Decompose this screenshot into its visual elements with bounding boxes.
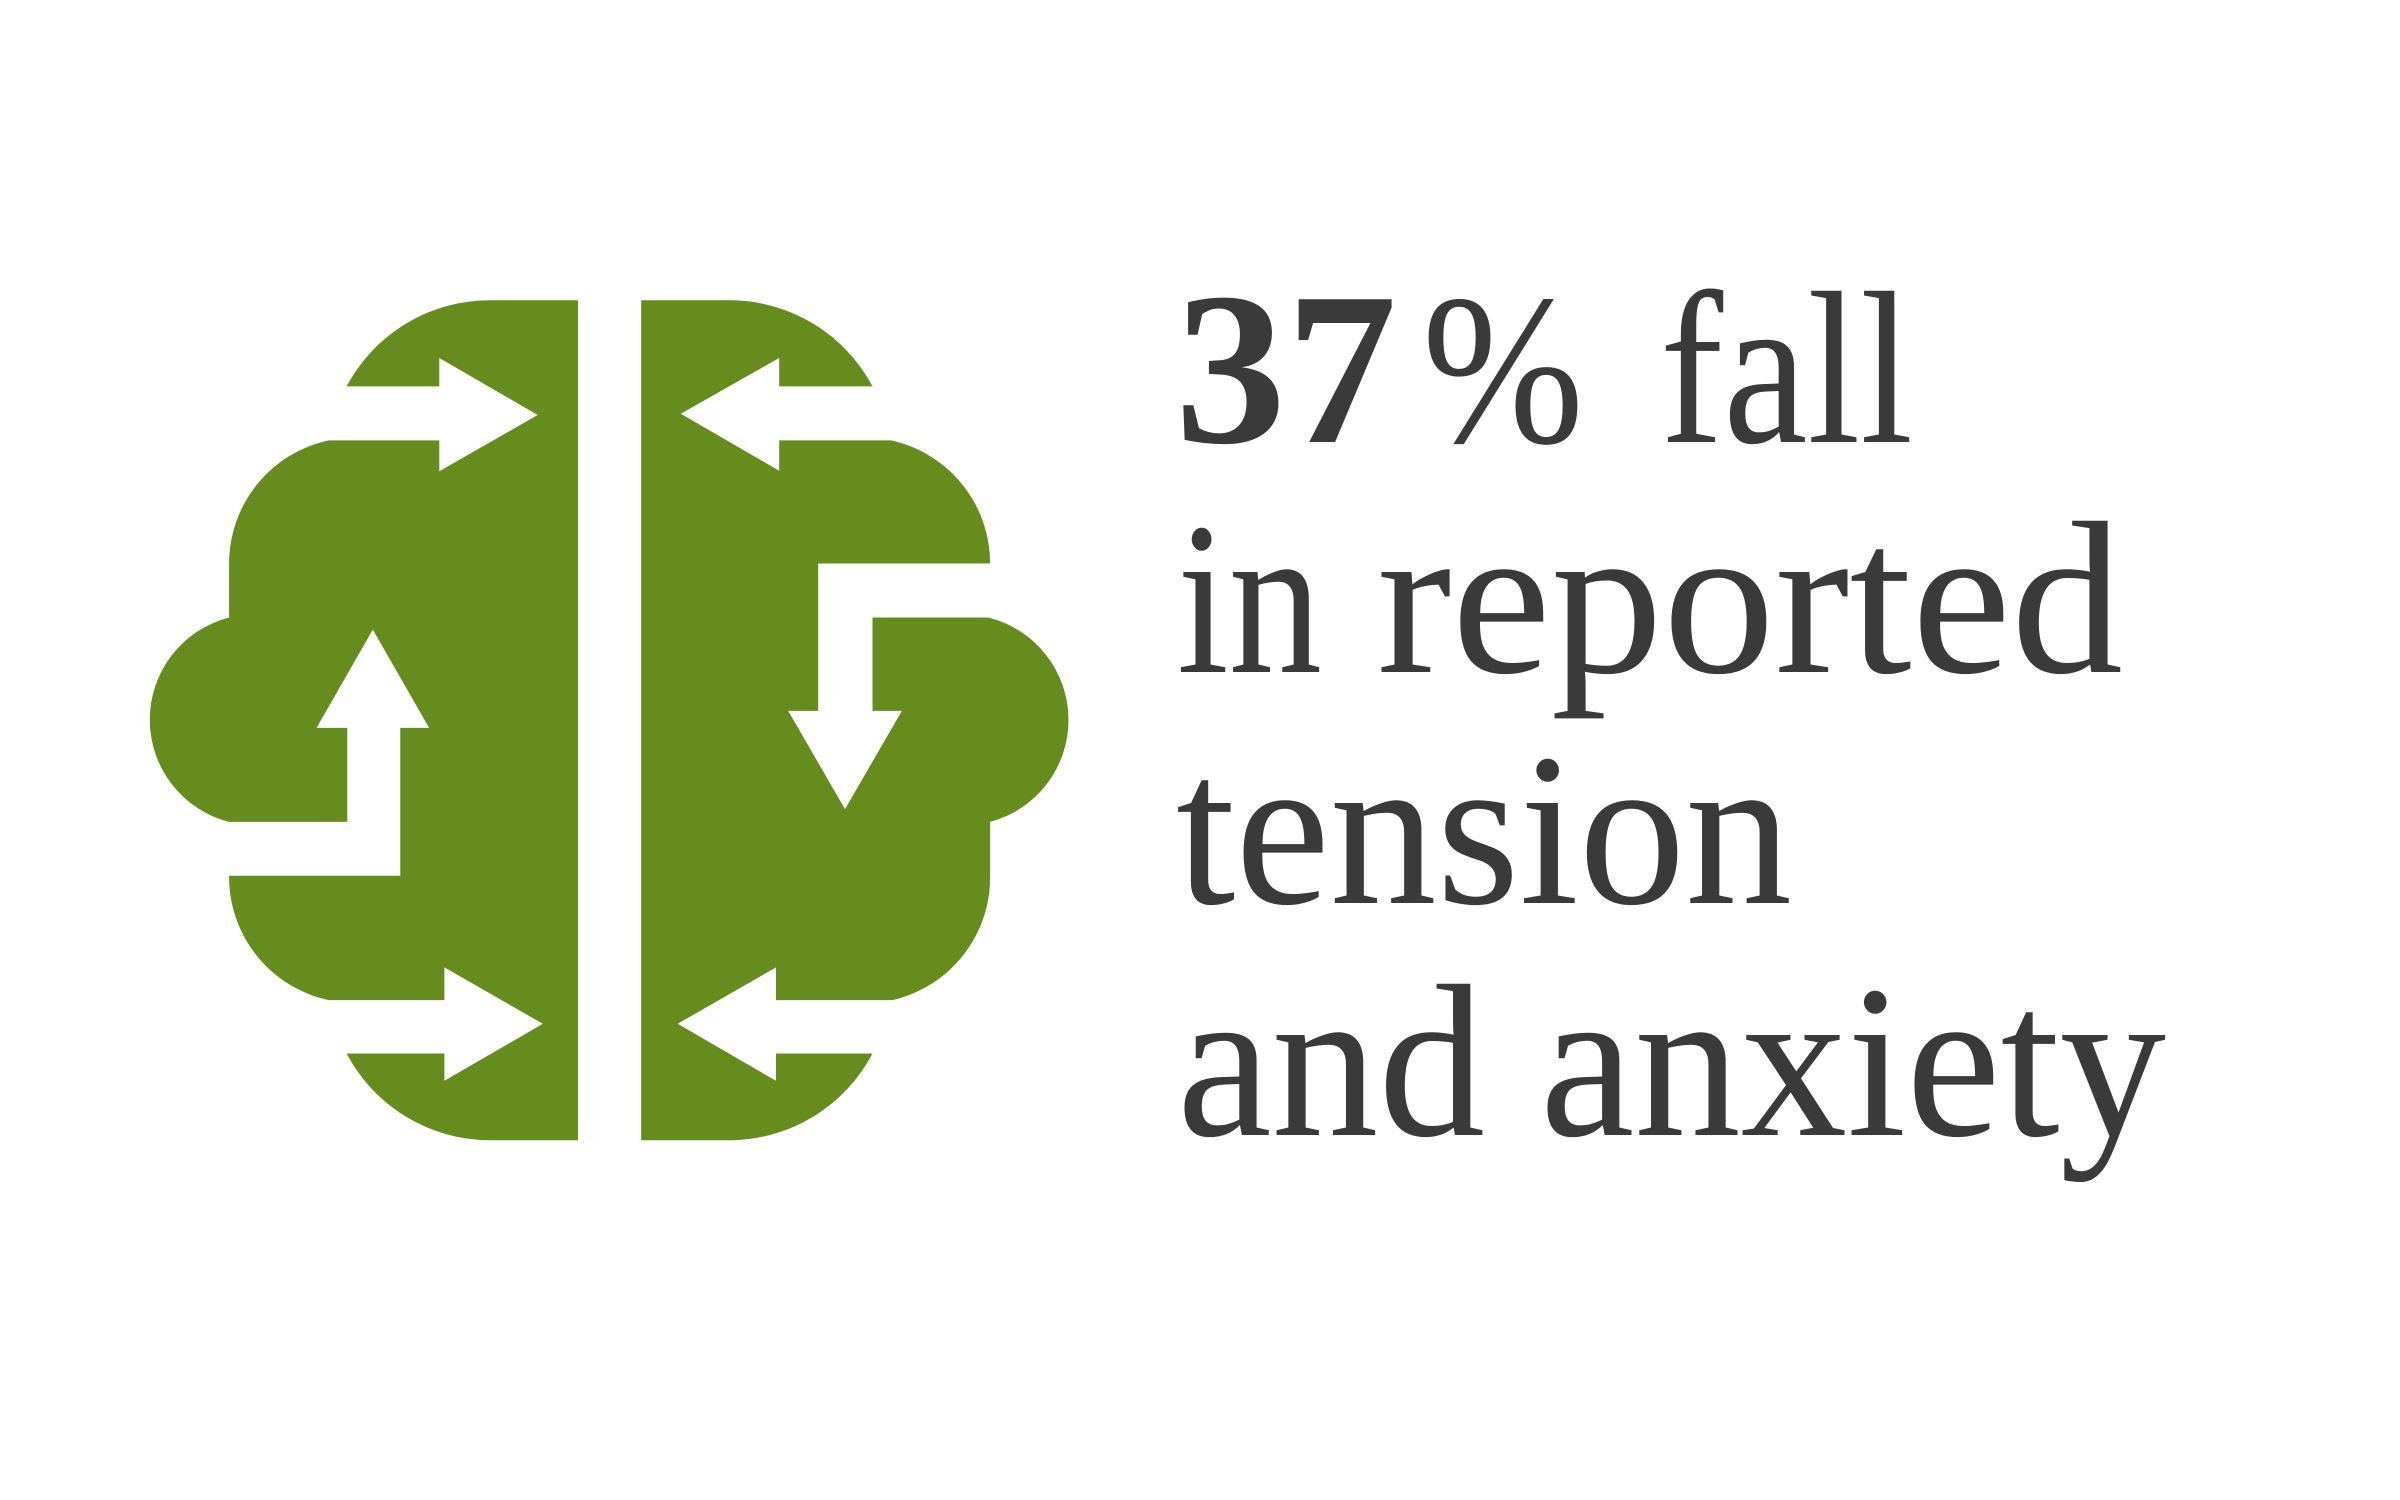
headline text [1175, 249, 2166, 1183]
line 4: and anxiety: anxiety [1540, 942, 2166, 1183]
line 4: and anxiety: and [1177, 942, 1485, 1183]
line 3: tension: tension [1176, 710, 1792, 951]
line 1: 37% fall: 37 [1175, 249, 1397, 490]
line 1: 37% fall [1175, 249, 1913, 490]
icon: brain with arrows [150, 300, 1068, 1140]
line 4: and anxiety [1177, 942, 2166, 1183]
line 2: in reported: in [1177, 479, 1322, 720]
line 1: 37% fall: % [1422, 250, 1584, 489]
line 2: in reported: reported [1377, 479, 2123, 720]
brain left hemisphere with arrows cut out [150, 300, 578, 1140]
brain right hemisphere with arrows cut out [641, 300, 1068, 1140]
line 1: 37% fall: fall [1660, 249, 1913, 490]
